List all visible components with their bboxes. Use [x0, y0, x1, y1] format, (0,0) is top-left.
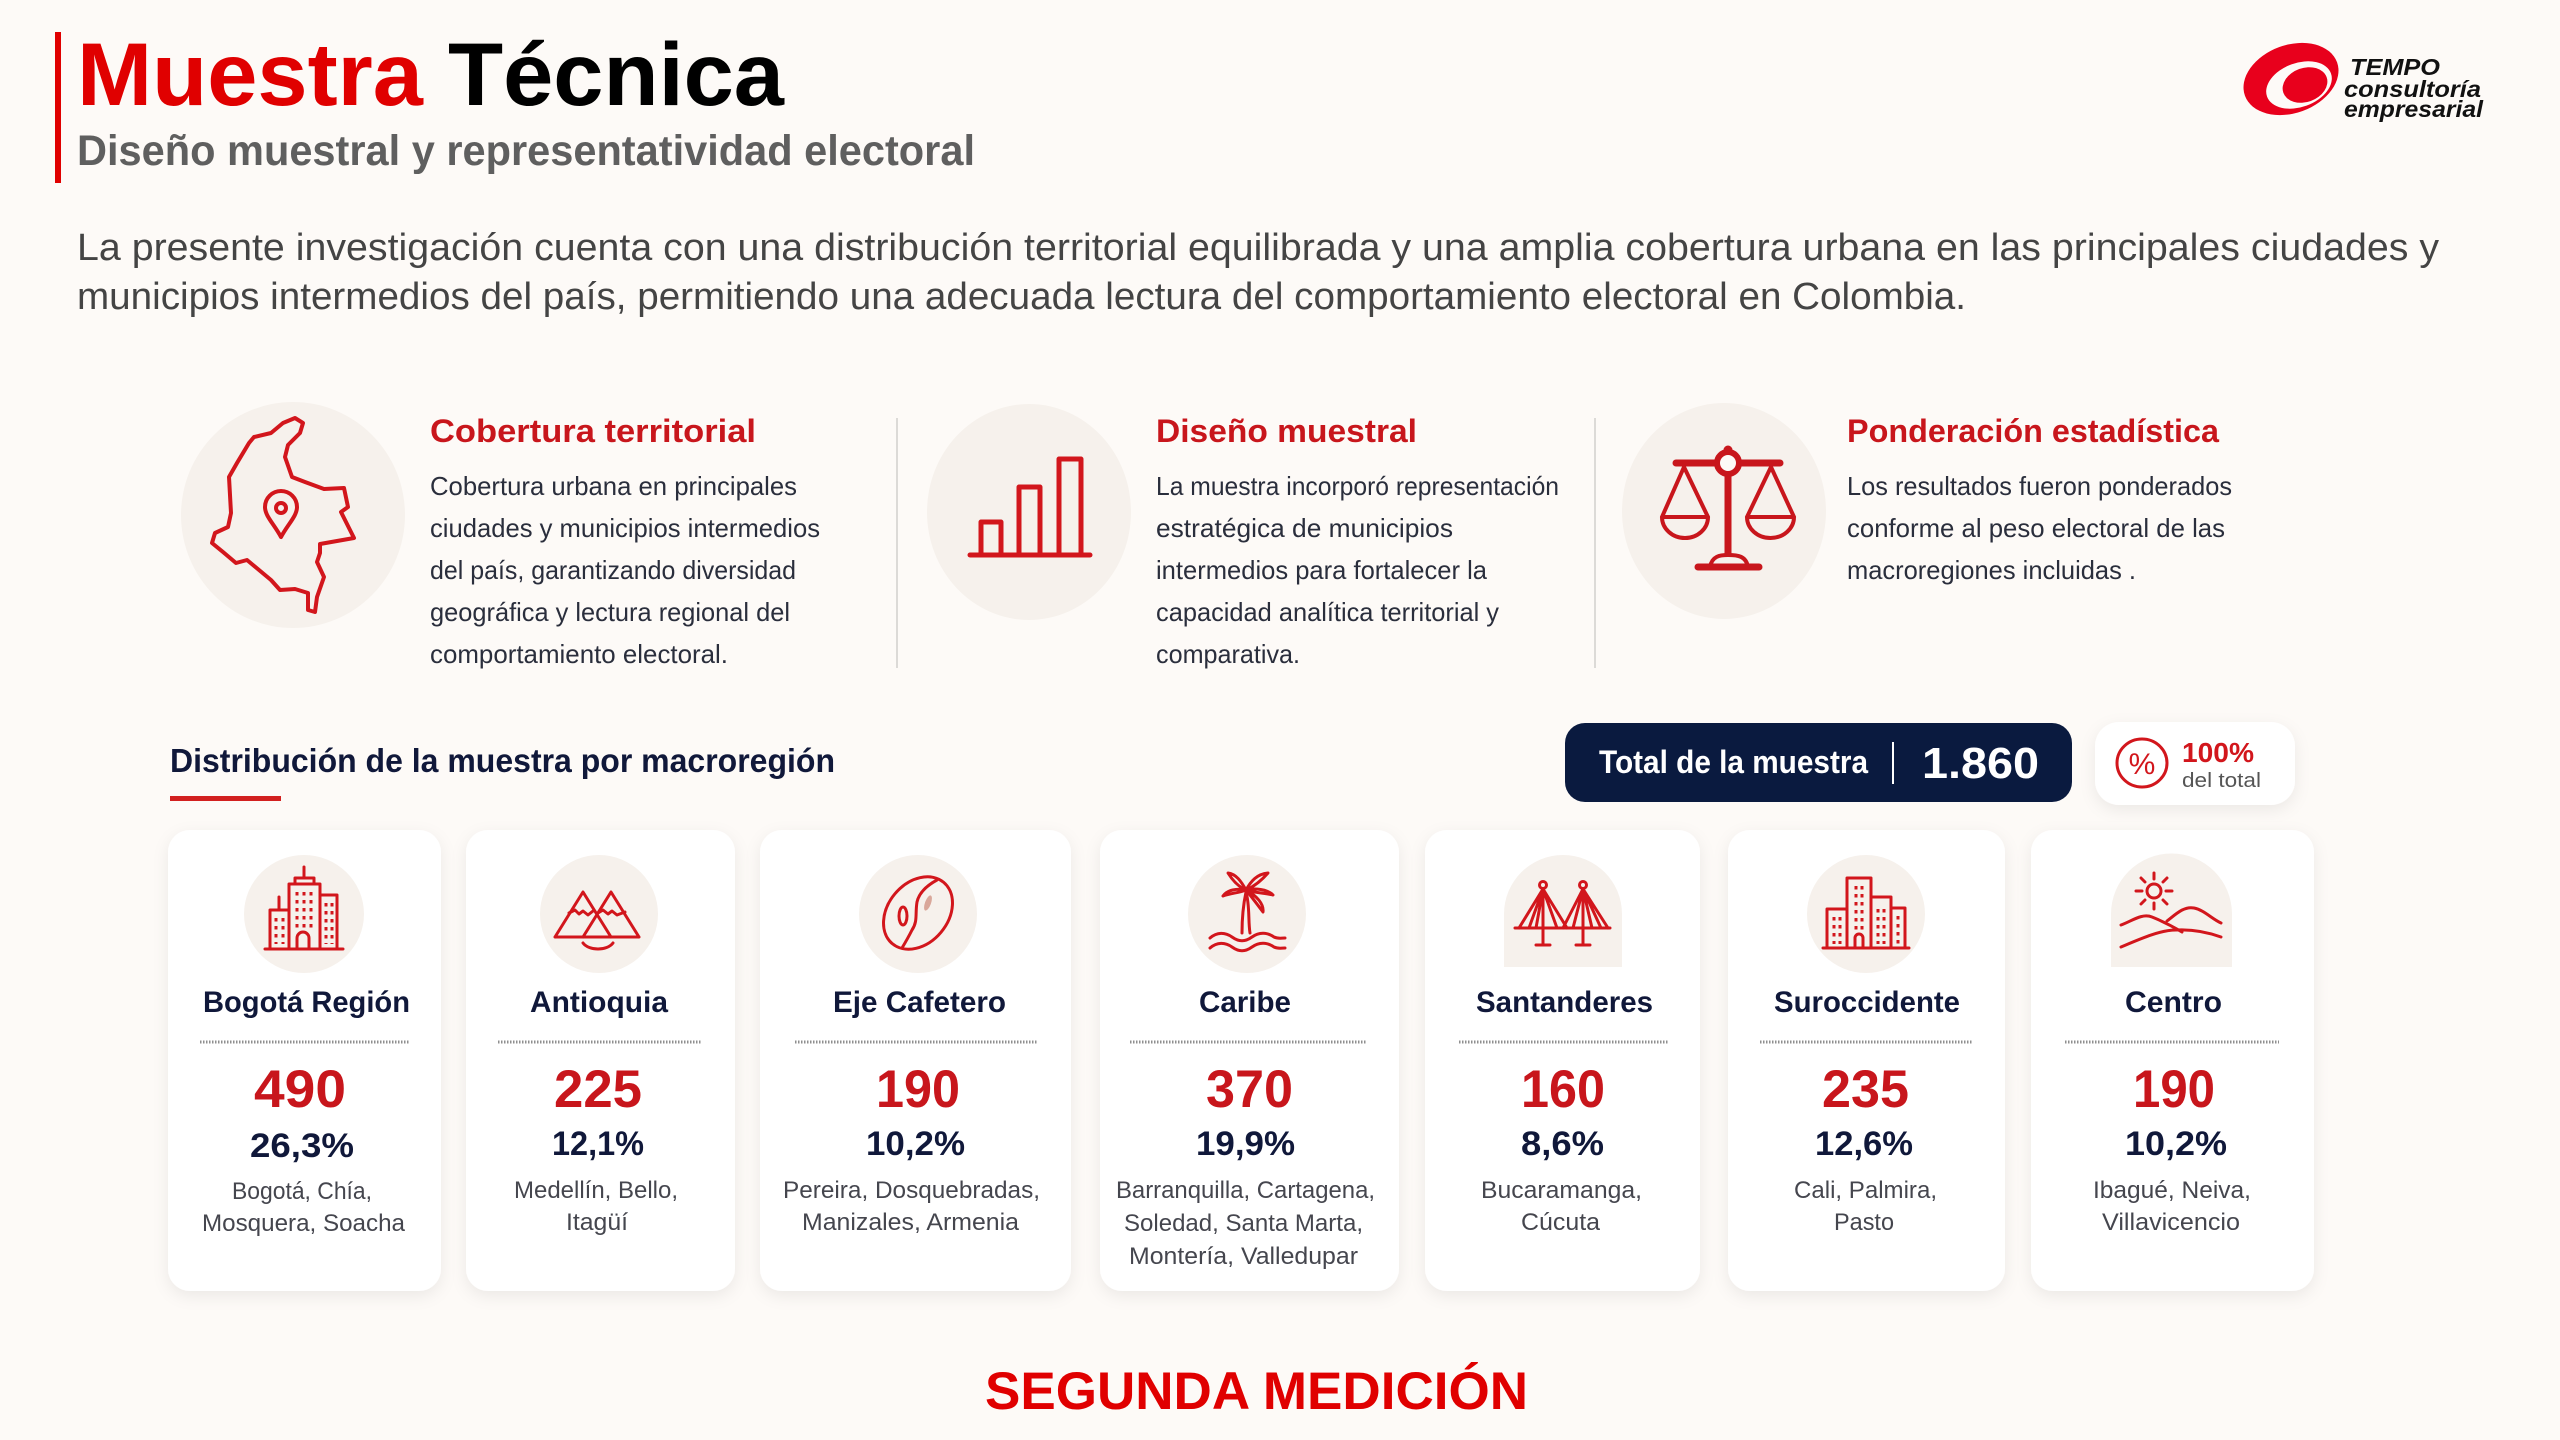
- panel: diseño muestral: La muestra incorporó representación: [1156, 471, 1559, 501]
- card: Bogotá Región: Bogotá, Chía,: [232, 1178, 372, 1205]
- card: Antioquia: [466, 830, 735, 1291]
- panel: cobertura territorial: ciudades y municipios intermedios: [430, 513, 820, 543]
- icon: buildings: [1823, 878, 1909, 948]
- card: Centro: [2031, 830, 2314, 1291]
- card: Eje Cafetero: [760, 830, 1071, 1291]
- 100% del total badge: %: [2129, 748, 2155, 781]
- 100% del total badge: del total: [2182, 770, 2261, 792]
- card: Caribe: Barranquilla, Cartagena,: [1116, 1177, 1375, 1204]
- intro paragraph: La presente investigación cuenta con una distribución territorial equilibrada y una amplia cobertura urbana en las principales ciudades y: [77, 227, 2439, 269]
- panel: diseño muestral: intermedios para fortalecer la: [1156, 555, 1488, 585]
- panel: cobertura territorial: comportamiento electoral.: [430, 639, 728, 669]
- card: Caribe: 19,9%: [1196, 1125, 1295, 1163]
- card: Eje Cafetero: Eje Cafetero: [833, 986, 1006, 1019]
- card: Eje Cafetero: Pereira, Dosquebradas,: [783, 1177, 1040, 1204]
- card: Santanderes: [1425, 830, 1700, 1291]
- total de la muestra pill: [1565, 723, 2072, 802]
- card: Antioquia: Antioquia: [530, 986, 668, 1019]
- card: Centro: Centro: [2125, 986, 2222, 1019]
- card: Eje Cafetero: Manizales, Armenia: [802, 1209, 1020, 1236]
- panel: ponderación estadística: Ponderación estadística: [1847, 413, 2219, 449]
- intro paragraph: [77, 227, 2439, 318]
- card: Santanderes: Santanderes: [1476, 986, 1653, 1019]
- section heading: distribución: [170, 742, 835, 801]
- card: Caribe: Montería, Valledupar: [1129, 1243, 1358, 1270]
- footer label: segunda medición: SEGUNDA MEDICIÓN: [985, 1361, 1528, 1421]
- icon: sun and hills: [2121, 873, 2221, 947]
- card: Santanderes: Cúcuta: [1521, 1209, 1601, 1236]
- panel: ponderación estadística: macroregiones incluidas .: [1847, 555, 2136, 585]
- card: Suroccidente: [1728, 830, 2005, 1291]
- total de la muestra pill: Total de la muestra: [1599, 744, 1868, 780]
- card: Santanderes: 8,6%: [1521, 1125, 1604, 1163]
- logo: Tempo consultoría empresarial: [2233, 30, 2484, 128]
- card: Bogotá Región: 490: [254, 1060, 346, 1119]
- panel: cobertura territorial: geográfica y lectura regional del: [430, 597, 790, 627]
- section heading: distribución: Distribución de la muestra por macroregión: [170, 742, 835, 779]
- card: Bogotá Región: Mosquera, Soacha: [202, 1210, 406, 1237]
- card: Caribe: 370: [1206, 1060, 1293, 1119]
- icon: coffee bean: [869, 863, 967, 963]
- card: Eje Cafetero: 10,2%: [866, 1125, 965, 1163]
- icon: bridge: [1515, 882, 1610, 945]
- panel: cobertura territorial: Cobertura urbana en principales: [430, 471, 797, 501]
- panel: diseño muestral: estratégica de municipios: [1156, 513, 1453, 543]
- 100% del total badge: 100%: [2182, 737, 2254, 768]
- title: Muestra Técnica: [77, 24, 786, 124]
- card: Caribe: Soledad, Santa Marta,: [1124, 1210, 1363, 1237]
- panel: diseño muestral: comparativa.: [1156, 639, 1300, 669]
- icon: skyscrapers: [265, 867, 343, 949]
- panel: cobertura territorial: Cobertura territorial: [430, 413, 756, 449]
- icon: bar chart: [970, 459, 1090, 555]
- panel: cobertura territorial: [181, 402, 820, 669]
- card: Centro: Villavicencio: [2102, 1209, 2240, 1236]
- 100% del total badge: [2095, 722, 2295, 805]
- card: Santanderes: 160: [1521, 1060, 1605, 1119]
- card: Antioquia: 12,1%: [552, 1125, 644, 1163]
- subtitle: Diseño muestral y representatividad electoral: [77, 127, 975, 175]
- card: Centro: Ibagué, Neiva,: [2093, 1177, 2251, 1204]
- panel: diseño muestral: capacidad analítica territorial y: [1156, 597, 1499, 627]
- panel: ponderación estadística: Los resultados fueron ponderados: [1847, 471, 2232, 501]
- card: Centro: 190: [2133, 1060, 2215, 1119]
- card: Suroccidente: 235: [1822, 1060, 1909, 1119]
- header accent bar: [55, 32, 61, 183]
- total de la muestra pill: 1.860: [1922, 739, 2039, 788]
- icon: Colombia map with pin: [212, 418, 354, 612]
- card: Centro: 10,2%: [2125, 1125, 2227, 1163]
- card: Caribe: [1100, 830, 1399, 1291]
- card: Antioquia: Medellín, Bello,: [514, 1177, 678, 1204]
- icon: scales: [1662, 450, 1794, 567]
- card: Santanderes: Bucaramanga,: [1481, 1177, 1642, 1204]
- panel: cobertura territorial: del país, garantizando diversidad: [430, 555, 796, 585]
- card: Bogotá Región: [168, 830, 441, 1291]
- intro paragraph: municipios intermedios del país, permitiendo una adecuada lectura del comportamiento electoral en Colombia.: [77, 276, 1966, 318]
- card: Eje Cafetero: 190: [876, 1060, 960, 1119]
- card: Bogotá Región: 26,3%: [250, 1127, 354, 1165]
- panel: ponderación estadística: [1622, 403, 2232, 619]
- card: Antioquia: Itagüí: [566, 1209, 628, 1236]
- card: Suroccidente: Cali, Palmira,: [1794, 1177, 1937, 1204]
- card: Suroccidente: 12,6%: [1815, 1125, 1913, 1163]
- card: Antioquia: 225: [554, 1060, 642, 1119]
- card: Suroccidente: Pasto: [1834, 1209, 1894, 1236]
- icon: mountains: [555, 892, 639, 949]
- icon: palm tree and waves: [1210, 873, 1285, 951]
- card: Caribe: Caribe: [1199, 986, 1291, 1019]
- card: Bogotá Región: Bogotá Región: [203, 986, 410, 1019]
- panel: diseño muestral: [927, 404, 1559, 669]
- card: Suroccidente: Suroccidente: [1774, 986, 1960, 1019]
- panel: ponderación estadística: conforme al peso electoral de las: [1847, 513, 2225, 543]
- panel: diseño muestral: Diseño muestral: [1156, 413, 1417, 449]
- logo: Tempo consultoría empresarial: TEMPO: [2350, 54, 2440, 80]
- logo: Tempo consultoría empresarial: empresarial: [2344, 96, 2484, 122]
- logo: Tempo consultoría empresarial: consultoría: [2344, 76, 2481, 102]
